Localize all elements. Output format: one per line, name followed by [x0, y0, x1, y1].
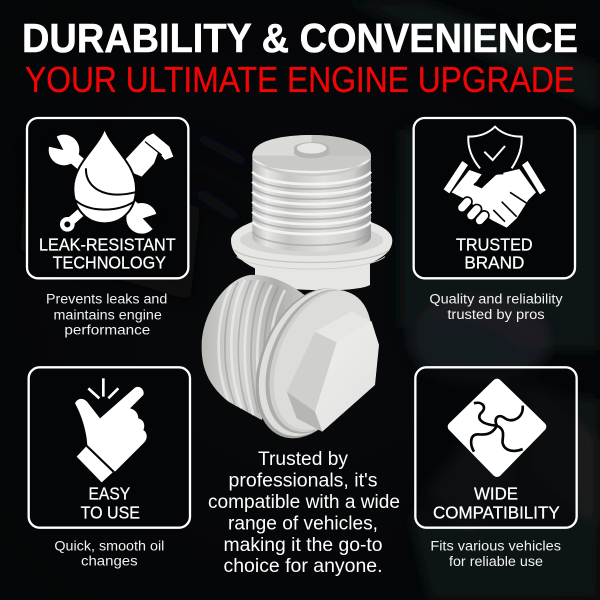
card description: performance [64, 322, 150, 337]
icon: finger snap hand [75, 378, 147, 482]
center paragraph: professionals, it's [228, 470, 378, 492]
center paragraph: compatible with a wide [208, 492, 400, 513]
card description: changes [81, 554, 138, 569]
center paragraph: Trusted by [258, 449, 348, 470]
card description [46, 291, 167, 337]
center paragraph: choice for anyone. [224, 556, 382, 577]
card: wide compatibility [415, 367, 577, 569]
card heading: TRUSTED [456, 234, 533, 254]
card description: Quick, smooth oil [54, 538, 164, 553]
card heading: LEAK-RESISTANT [39, 234, 176, 254]
card description [54, 538, 164, 569]
icon: shield and handshake [444, 127, 546, 228]
card description [429, 291, 563, 322]
card: leak-resistant technology [27, 118, 188, 337]
card frame [29, 367, 190, 528]
title [22, 15, 578, 100]
center paragraph: making it the go-to [224, 535, 382, 556]
card description: Fits various vehicles [430, 538, 561, 553]
icon: wrench, pipe wrench and oil drop [42, 128, 173, 234]
card frame [27, 118, 188, 278]
card description: for reliable use [449, 554, 543, 569]
card heading: TO USE [81, 502, 140, 522]
icon: puzzle diamond [452, 383, 542, 472]
card frame [414, 118, 575, 278]
double-ended wrench [49, 135, 157, 234]
center paragraph: range of vehicles, [228, 514, 378, 534]
card heading [433, 484, 560, 522]
card description: Prevents leaks and [46, 291, 167, 306]
card heading [39, 234, 176, 272]
card description: maintains engine [53, 307, 162, 322]
card: trusted brand [414, 118, 575, 322]
card description [430, 538, 561, 569]
card heading [81, 484, 140, 522]
card: easy to use [29, 367, 190, 569]
card heading: TECHNOLOGY [53, 252, 166, 272]
pipe wrench [60, 133, 173, 232]
card heading: COMPATIBILITY [433, 502, 560, 522]
card heading: BRAND [464, 252, 524, 272]
card heading: WIDE [474, 484, 518, 504]
card description: Quality and reliability [429, 291, 563, 306]
card heading: EASY [88, 484, 130, 504]
product image: bottom drain plug [202, 272, 391, 454]
center paragraph [208, 449, 400, 577]
oil drop [73, 128, 136, 223]
card frame [415, 367, 577, 528]
product image: top drain plug [231, 135, 392, 290]
title line 1: DURABILITY & CONVENIENCE [22, 15, 578, 61]
card heading [456, 234, 533, 272]
card description: trusted by pros [447, 307, 545, 322]
